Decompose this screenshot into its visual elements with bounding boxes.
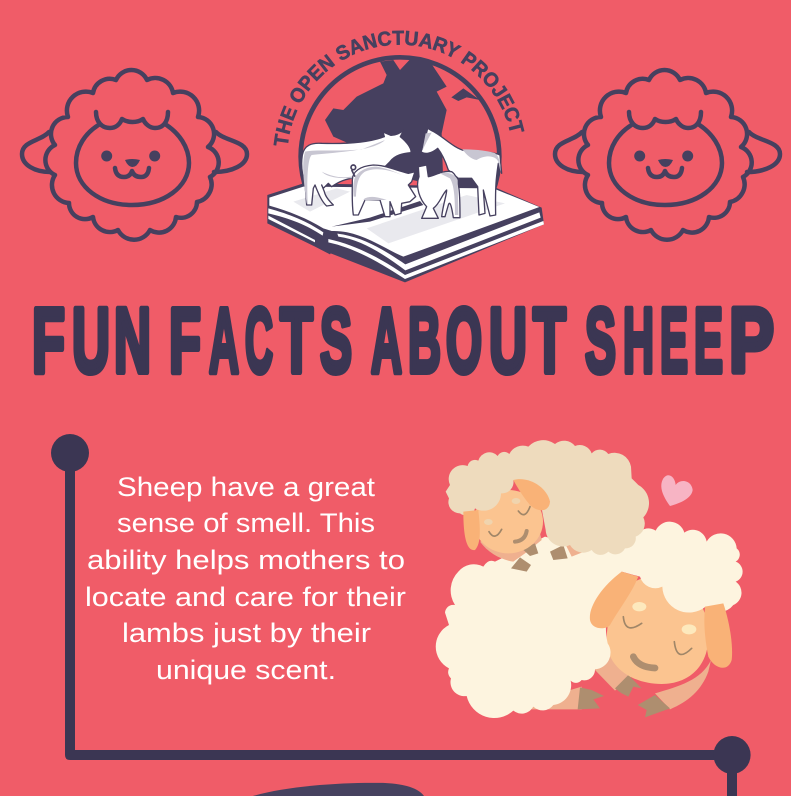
- title: C: [245, 290, 273, 392]
- fact text: sense of smell: Sheep have a great: [117, 472, 376, 502]
- logo horse and rooster: [418, 128, 502, 218]
- title: A: [371, 290, 402, 392]
- fact text: sense of smell: unique scent.: [156, 655, 336, 685]
- logo arc text: THE OPEN SANCTUARY PROJECT: [274, 30, 524, 146]
- title: S: [585, 290, 616, 392]
- next panel blob (cropped): [253, 783, 424, 796]
- title: E: [660, 290, 688, 392]
- title: T: [280, 290, 313, 392]
- fact text: sense of smell: locate and care for their: [85, 582, 406, 612]
- logo cow and pig: [302, 130, 416, 217]
- title: B: [408, 290, 441, 392]
- logo globe: [301, 57, 499, 256]
- connector line with end nodes: [51, 434, 751, 796]
- title: E: [694, 290, 723, 392]
- icon: right sheep face: [555, 70, 780, 240]
- icon: heart: [661, 475, 693, 506]
- title: S: [320, 290, 352, 392]
- title: H: [623, 290, 654, 392]
- icon: left sheep face: [22, 70, 247, 240]
- ewe: [436, 522, 743, 718]
- fact text: sense of smell: sense of smell. This: [117, 508, 375, 538]
- illustration: ewe and lamb: [436, 440, 743, 718]
- logo: The Open Sanctuary Project: [267, 30, 544, 282]
- fact text: sense of smell: lambs just by their: [122, 618, 371, 648]
- lamb: [446, 440, 649, 572]
- title: F: [32, 290, 65, 392]
- title: T: [533, 290, 566, 392]
- fact text: sense of smell: ability helps mothers to: [87, 545, 405, 575]
- title: O: [446, 290, 482, 392]
- title: U: [489, 290, 527, 392]
- logo book: [267, 183, 544, 282]
- title: U: [72, 290, 110, 392]
- title: A: [209, 290, 239, 392]
- title: F: [169, 290, 201, 392]
- title: N: [114, 290, 151, 392]
- title: P: [729, 290, 774, 392]
- fact text: sense of smell: [85, 472, 406, 685]
